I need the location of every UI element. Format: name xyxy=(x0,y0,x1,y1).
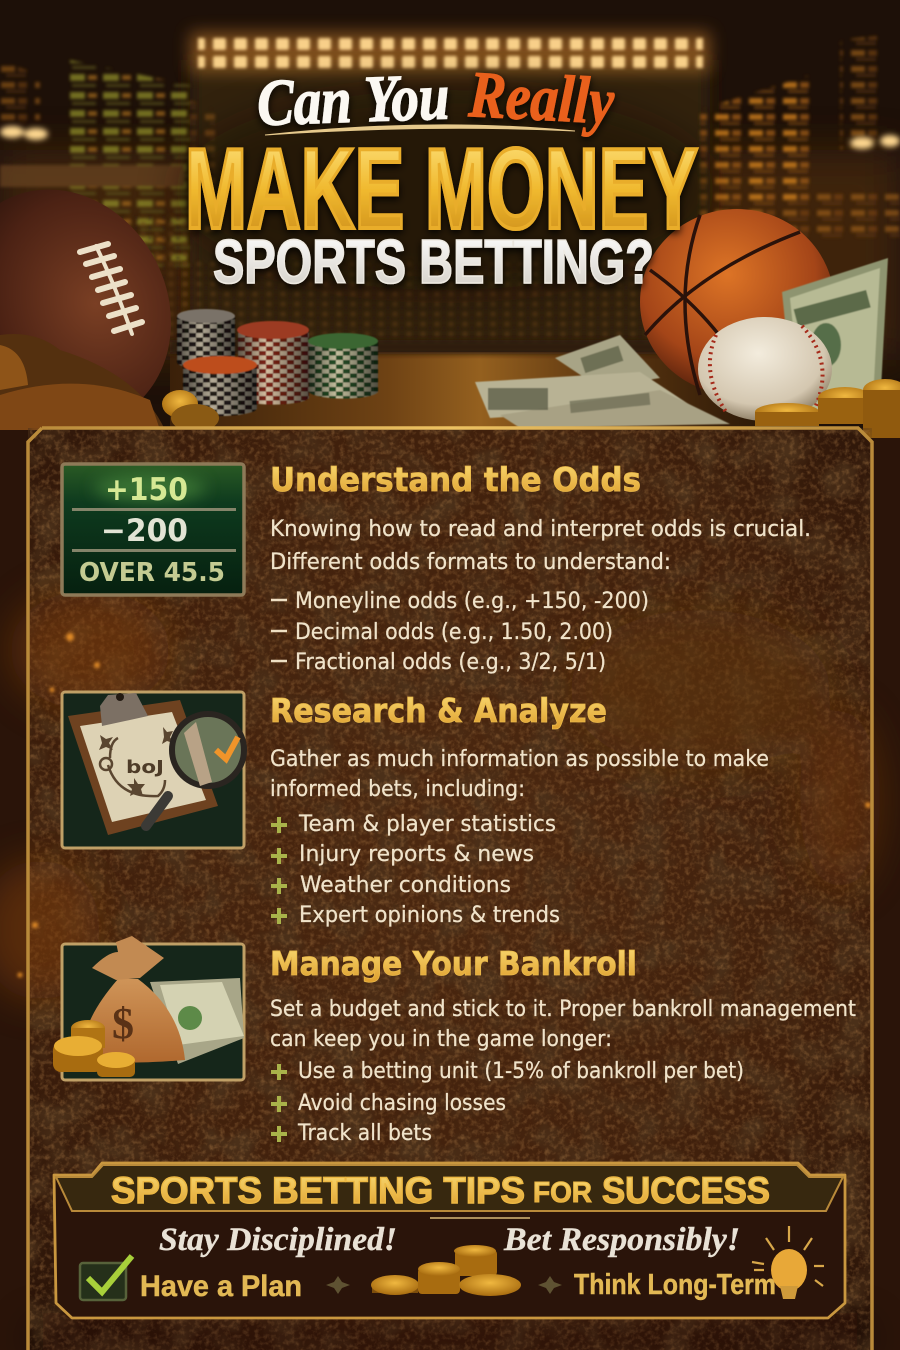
odds board icon: −200 xyxy=(101,513,188,549)
baseball xyxy=(698,317,832,421)
left scoreboard xyxy=(0,60,215,270)
intro text xyxy=(270,996,856,1052)
odds board icon: +150 xyxy=(105,472,188,508)
darkening behind title xyxy=(175,90,715,290)
money bag icon: $ xyxy=(112,999,134,1048)
warm glow patches xyxy=(0,590,880,1350)
odds board icon: OVER 45.5 xyxy=(79,558,225,588)
tip: think long-term: Think Long-Term xyxy=(574,1269,776,1301)
stadium lights xyxy=(198,34,703,68)
warm ambience xyxy=(0,150,900,360)
slogan: bet responsibly: Bet Responsibly! xyxy=(503,1222,740,1258)
intro text: informed bets, including: xyxy=(270,776,525,802)
section: understand the odds xyxy=(62,460,811,675)
ornament left xyxy=(326,1276,350,1294)
laces xyxy=(80,244,142,334)
title line: Can You Really: Can You xyxy=(256,60,450,140)
main panel xyxy=(0,428,880,1350)
stadium scene xyxy=(0,0,900,432)
icon: gold coins xyxy=(371,1245,521,1296)
intro text: Gather as much information as possible to make xyxy=(270,746,769,772)
banner header: SPORTS BETTING TIPS xyxy=(111,1170,525,1211)
banner header: FOR xyxy=(533,1177,592,1209)
odds board icon xyxy=(62,464,244,595)
heading: Understand the Odds xyxy=(270,460,641,499)
title xyxy=(185,58,698,297)
embers xyxy=(18,633,871,1258)
heading: Manage Your Bankroll xyxy=(270,944,637,983)
heading: Research & Analyze xyxy=(270,691,607,730)
football xyxy=(0,151,212,465)
research list: Expert opinions & trends xyxy=(299,902,560,928)
green chip stack xyxy=(308,333,378,399)
bankroll list: Use a betting unit (1-5% of bankroll per bet) xyxy=(298,1058,744,1084)
table xyxy=(170,352,790,432)
research list: Team & player statistics xyxy=(298,811,556,837)
banner frame xyxy=(54,1163,845,1318)
odds formats list: Fractional odds (e.g., 3/2, 5/1) xyxy=(295,649,606,675)
title line: Can You Really xyxy=(256,58,616,140)
bankroll list: Avoid chasing losses xyxy=(298,1090,506,1116)
dollar bill xyxy=(782,258,888,420)
tip: have a plan: Have a Plan xyxy=(140,1270,302,1303)
clipboard and magnifier icon xyxy=(62,692,244,848)
money bag icon xyxy=(53,936,244,1080)
title underline swoosh xyxy=(265,125,575,135)
intro text: can keep you in the game longer: xyxy=(270,1026,612,1052)
coins left xyxy=(162,390,219,432)
slogan: stay disciplined: Stay Disciplined! xyxy=(159,1222,397,1258)
baseball glove xyxy=(0,334,165,430)
red chip stack xyxy=(237,321,309,405)
intro text: Set a budget and stick to it. Proper bankroll management xyxy=(270,996,856,1022)
research list xyxy=(271,811,560,928)
tips banner xyxy=(54,1163,845,1318)
banner header xyxy=(56,1165,843,1211)
crowd xyxy=(180,260,720,350)
title line: Sports Betting: SPORTS BETTING? xyxy=(213,228,654,297)
intro text: Different odds formats to understand: xyxy=(270,549,671,575)
section: research and analyze xyxy=(62,691,769,928)
banner header: SUCCESS xyxy=(602,1170,770,1211)
intro text xyxy=(270,516,811,575)
panel frame xyxy=(28,428,872,1350)
odds formats list: Decimal odds (e.g., 1.50, 2.00) xyxy=(295,619,613,645)
bankroll list xyxy=(271,1058,744,1146)
icon: check box xyxy=(80,1256,132,1300)
title line: Can You Really: Really xyxy=(466,58,616,139)
poker chips xyxy=(177,309,378,416)
research list: Injury reports & news xyxy=(299,841,534,867)
ornament right xyxy=(538,1276,562,1294)
icon: light bulb xyxy=(752,1226,824,1299)
black chip stack xyxy=(177,309,235,369)
dark orange chip stack xyxy=(183,356,257,416)
right scoreboard xyxy=(700,35,900,240)
clipboard and magnifier icon: boJ xyxy=(126,757,164,778)
stadium wall xyxy=(190,60,710,360)
intro text: Knowing how to read and interpret odds is crucial. xyxy=(270,516,811,542)
floodlights xyxy=(0,126,900,149)
glow behind lights xyxy=(190,32,710,72)
section: manage your bankroll xyxy=(53,936,856,1146)
coins right xyxy=(755,379,900,438)
odds formats list: Moneyline odds (e.g., +150, -200) xyxy=(295,588,649,614)
cash pile xyxy=(475,335,730,428)
basketball xyxy=(640,209,834,395)
research list: Weather conditions xyxy=(300,872,511,898)
intro text xyxy=(270,746,769,802)
bankroll list: Track all bets xyxy=(297,1120,432,1146)
odds formats list xyxy=(271,588,649,675)
